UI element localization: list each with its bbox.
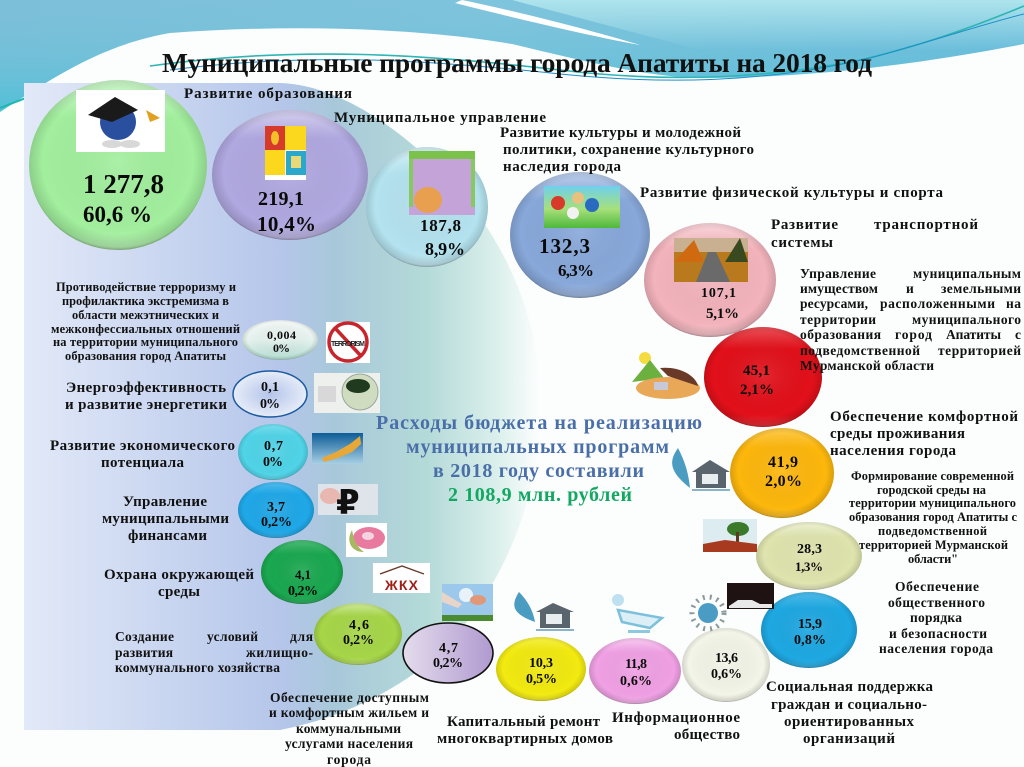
bubble: environment (261, 540, 343, 604)
icon: children sport (544, 186, 620, 228)
label: terrorism: профилактика экстремизма в (62, 294, 229, 308)
label: public order: порядка (910, 610, 962, 625)
label: utilities: для (290, 629, 313, 644)
value: capital repair (526, 656, 557, 687)
value: comfort: 2,0% (765, 473, 802, 490)
label: energy: Энергоэффективность (66, 380, 226, 396)
label: capital repair: Капитальный ремонт (447, 714, 601, 730)
icon: ruble (318, 483, 378, 523)
label: utilities: условий (207, 629, 258, 644)
icon: no terrorism: TERRORISM (331, 341, 365, 348)
icon: culture poster (409, 151, 475, 215)
value: urban environment (795, 542, 823, 574)
label: housing: коммунальными (296, 721, 401, 736)
value: public order (794, 617, 826, 648)
label: culture: Развитие культуры и молодежной (500, 125, 741, 141)
label: utilities: развития (115, 645, 173, 660)
label: modern urban environment: подведомственной (878, 524, 987, 538)
value: urban environment: 1,3% (795, 559, 823, 574)
label: modern urban environment: территорией Мурманской (859, 538, 1008, 552)
bubble: municipal management (212, 110, 368, 240)
label: public order: Обеспечение (895, 579, 979, 594)
label: property management: расположенными (880, 296, 995, 311)
value: transport (701, 286, 739, 322)
icon: ruble: ₽ (336, 483, 360, 523)
value: terrorism: 0,004 (267, 328, 296, 342)
label: municipal management: Муниципальное управление (334, 110, 546, 126)
icon: no terrorism (326, 322, 370, 363)
label: property management: имуществом (800, 281, 878, 296)
value: housing: 4,7 (439, 641, 458, 656)
label: property management: муниципального (912, 312, 1021, 327)
label: property management: с (1015, 327, 1021, 342)
bubble: utilities (314, 603, 402, 665)
icon: land plot (632, 352, 700, 399)
bubble: public order (761, 592, 857, 668)
label: property management: ресурсами, (800, 296, 868, 311)
label: terrorism: области межэтнических и (72, 308, 219, 322)
value: information society (620, 657, 652, 689)
label: economy: Развитие экономического (50, 438, 235, 454)
bubble: terrorism (242, 320, 318, 360)
value: terrorism: 0% (273, 341, 290, 355)
label: environment: Охрана окружающей (104, 567, 254, 583)
value: energy: 0% (260, 397, 280, 412)
value: terrorism (267, 328, 296, 355)
label: social support: Социальная поддержка (766, 679, 934, 695)
bubble: energy (233, 371, 307, 417)
label: property management: Управление (800, 266, 876, 281)
bubble: education (29, 80, 207, 250)
value: housing (433, 641, 463, 671)
value: capital repair: 0,5% (526, 672, 557, 687)
value: finance (261, 500, 292, 530)
label: housing: Обеспечение доступным (270, 690, 429, 705)
value: energy: 0,1 (261, 380, 279, 395)
label: property management: территорией (938, 343, 1021, 358)
value: culture (420, 216, 465, 259)
value: economy: 0% (263, 455, 283, 470)
title: Муниципальные программы города Апатиты на 2018 год (162, 47, 872, 78)
label: property management: город (895, 327, 932, 342)
bubble: transport (644, 223, 776, 337)
label: environment: среды (158, 584, 200, 600)
value: economy: 0,7 (264, 439, 283, 454)
label: modern urban environment: области" (908, 552, 958, 566)
value: finance: 0,2% (261, 515, 292, 530)
label: property management (800, 266, 1021, 373)
value: education: 1 277,8 (83, 169, 164, 199)
label: social support: организаций (803, 731, 895, 747)
label: information society (612, 710, 740, 743)
label: modern urban environment: образования город Апатиты с (849, 510, 1018, 524)
label: comfortable environment: населения города (830, 443, 956, 459)
value: social support: 0,6% (711, 667, 742, 682)
label: terrorism: Противодействие терроризму и (56, 280, 236, 294)
value: information society: 11,8 (625, 657, 647, 672)
value: property: 2,1% (740, 382, 774, 398)
value: environment: 0,2% (288, 584, 318, 599)
label: finance: финансами (128, 528, 207, 544)
label: transport: транспортной (874, 217, 978, 233)
label: culture: политики, сохранение культурного (503, 142, 754, 158)
icon: hands (442, 584, 493, 621)
value: education (83, 169, 164, 227)
budget summary text: 2 108,9 млн. рублей (448, 484, 632, 506)
value: housing: 0,2% (433, 656, 463, 671)
bubble: comfort (730, 428, 834, 518)
value: education: 60,6 % (83, 202, 152, 227)
bubble: urban environment (756, 522, 862, 590)
label: property management: подведомственной (800, 343, 920, 358)
bubble: capital repair (496, 637, 586, 701)
icon: graduate globe (76, 90, 165, 152)
value: municipal management: 10,4% (257, 212, 316, 236)
icon: flower (346, 523, 387, 557)
label: social support (766, 679, 934, 747)
value: sport: 6,3% (558, 261, 594, 280)
label: public order: и безопасности (889, 626, 987, 641)
bubble values (83, 169, 826, 689)
label: utilities: Создание (115, 629, 174, 644)
label: terrorism: межконфессиальных отношений (51, 322, 240, 336)
icon: housing services (373, 563, 430, 593)
label: terrorism (51, 280, 240, 363)
value: utilities: 4,6 (349, 618, 369, 633)
value: utilities: 0,2% (343, 633, 374, 648)
label: utilities: коммунального хозяйства (115, 660, 280, 675)
value: sport (539, 234, 594, 280)
label: utilities (115, 629, 313, 675)
icon: sun (692, 597, 724, 629)
label: housing: города (327, 752, 371, 767)
label: transport (771, 217, 978, 251)
icon: house with drop (672, 448, 730, 491)
budget summary text: в 2018 году составили (433, 460, 644, 482)
label: capital repair (437, 714, 613, 747)
icon: energy bulb (314, 373, 380, 413)
value: municipal management: 219,1 (258, 188, 304, 210)
bubble: social support (682, 628, 770, 702)
label: transport: системы (771, 235, 833, 251)
label: culture (500, 125, 754, 175)
value: comfort (765, 454, 802, 490)
budget summary text: Расходы бюджета на реализацию (376, 412, 702, 434)
label: finance: муниципальными (102, 511, 229, 527)
icon: growth chart (312, 433, 363, 464)
value: municipal management (257, 188, 316, 236)
icon: tree on island (703, 519, 757, 552)
label: comfortable environment: Обеспечение комфортной (830, 409, 1018, 425)
icon: autumn road (674, 238, 748, 282)
label: social support: ориентированных (784, 714, 914, 730)
value: public order: 0,8% (794, 633, 826, 648)
icons (76, 90, 774, 633)
icon: coat of arms (265, 126, 306, 180)
label: sport: Развитие физической культуры и спорта (640, 185, 944, 201)
icon: housing services: ЖКХ (384, 577, 419, 593)
bubble: information society (589, 638, 681, 704)
value: social support: 13,6 (715, 651, 738, 666)
icon: police car (727, 583, 774, 609)
label: property management: муниципальным (913, 266, 1021, 281)
label: comfortable environment (830, 409, 1018, 459)
icon: monitor (612, 594, 662, 633)
bubble: property (704, 327, 822, 427)
label: energy (65, 380, 227, 413)
budget summary text: муниципальных программ (406, 436, 669, 458)
label: utilities: жилищно- (246, 645, 313, 660)
value: culture: 8,9% (425, 239, 465, 259)
label: housing (269, 690, 429, 767)
label: terrorism: на территории муниципального (53, 335, 238, 349)
label: energy: и развитие энергетики (65, 397, 227, 413)
label: housing: услугами населения (285, 736, 413, 751)
label: property management: на (1006, 296, 1021, 311)
background panel (24, 83, 540, 730)
value: finance: 3,7 (267, 500, 285, 515)
label: modern urban environment: Формирование современной (851, 469, 1014, 483)
value: environment: 4,1 (295, 567, 311, 582)
bubble: culture (366, 147, 488, 267)
value: information society: 0,6% (620, 674, 652, 689)
value: environment (288, 567, 318, 599)
value: transport: 107,1 (701, 286, 736, 301)
label: economy (50, 438, 235, 471)
icon: house with leaf (514, 592, 574, 631)
value: culture: 187,8 (420, 216, 461, 235)
value: public order: 15,9 (798, 617, 822, 632)
value: urban environment: 28,3 (797, 542, 822, 557)
value: economy (263, 439, 283, 470)
label: culture: наследия города (503, 159, 622, 175)
label: property management: территории (800, 312, 876, 327)
label: modern urban environment: территории муниципального (849, 496, 1016, 510)
label: public order (879, 579, 993, 656)
label: public order: населения города (879, 641, 993, 656)
bubble: sport (510, 172, 650, 298)
label: property management: и (906, 281, 914, 296)
label: transport: Развитие (771, 217, 838, 233)
bubble: economy (238, 424, 308, 480)
label: economy: потенциала (101, 455, 184, 471)
label: capital repair: многоквартирных домов (437, 731, 613, 747)
label: comfortable environment: среды проживания (830, 426, 965, 442)
value: comfort: 41,9 (768, 454, 798, 471)
value: sport: 132,3 (539, 234, 590, 258)
label: property management: Апатиты (946, 327, 1001, 342)
label: modern urban environment (849, 469, 1018, 566)
bubble: housing (403, 623, 493, 683)
bubble: finance (238, 482, 314, 538)
value: social support (711, 651, 742, 682)
value: capital repair: 10,3 (529, 656, 553, 671)
label: finance: Управление (123, 494, 207, 510)
label: modern urban environment: городской среды на (877, 483, 986, 497)
label: information society: общество (674, 727, 740, 743)
label: finance (102, 494, 229, 544)
budget summary text (376, 412, 702, 506)
value: utilities (343, 618, 374, 648)
label: property management: Мурманской области (800, 358, 934, 373)
label: terrorism: образования город Апатиты (65, 349, 226, 363)
label: housing: и комфортным жильем и (269, 705, 429, 720)
label: property management: земельными (941, 281, 1021, 296)
value: property: 45,1 (743, 363, 770, 379)
label: education: Развитие образования (184, 86, 352, 102)
label: public order: общественного (888, 595, 985, 610)
label: information society: Информационное (612, 710, 740, 726)
label: property management: образования (800, 327, 881, 342)
label: environment (104, 567, 254, 600)
value: property (740, 363, 774, 398)
value: energy (260, 380, 280, 412)
label: social support: граждан и социально- (771, 697, 927, 713)
value: transport: 5,1% (706, 306, 739, 322)
bubbles (29, 80, 862, 704)
